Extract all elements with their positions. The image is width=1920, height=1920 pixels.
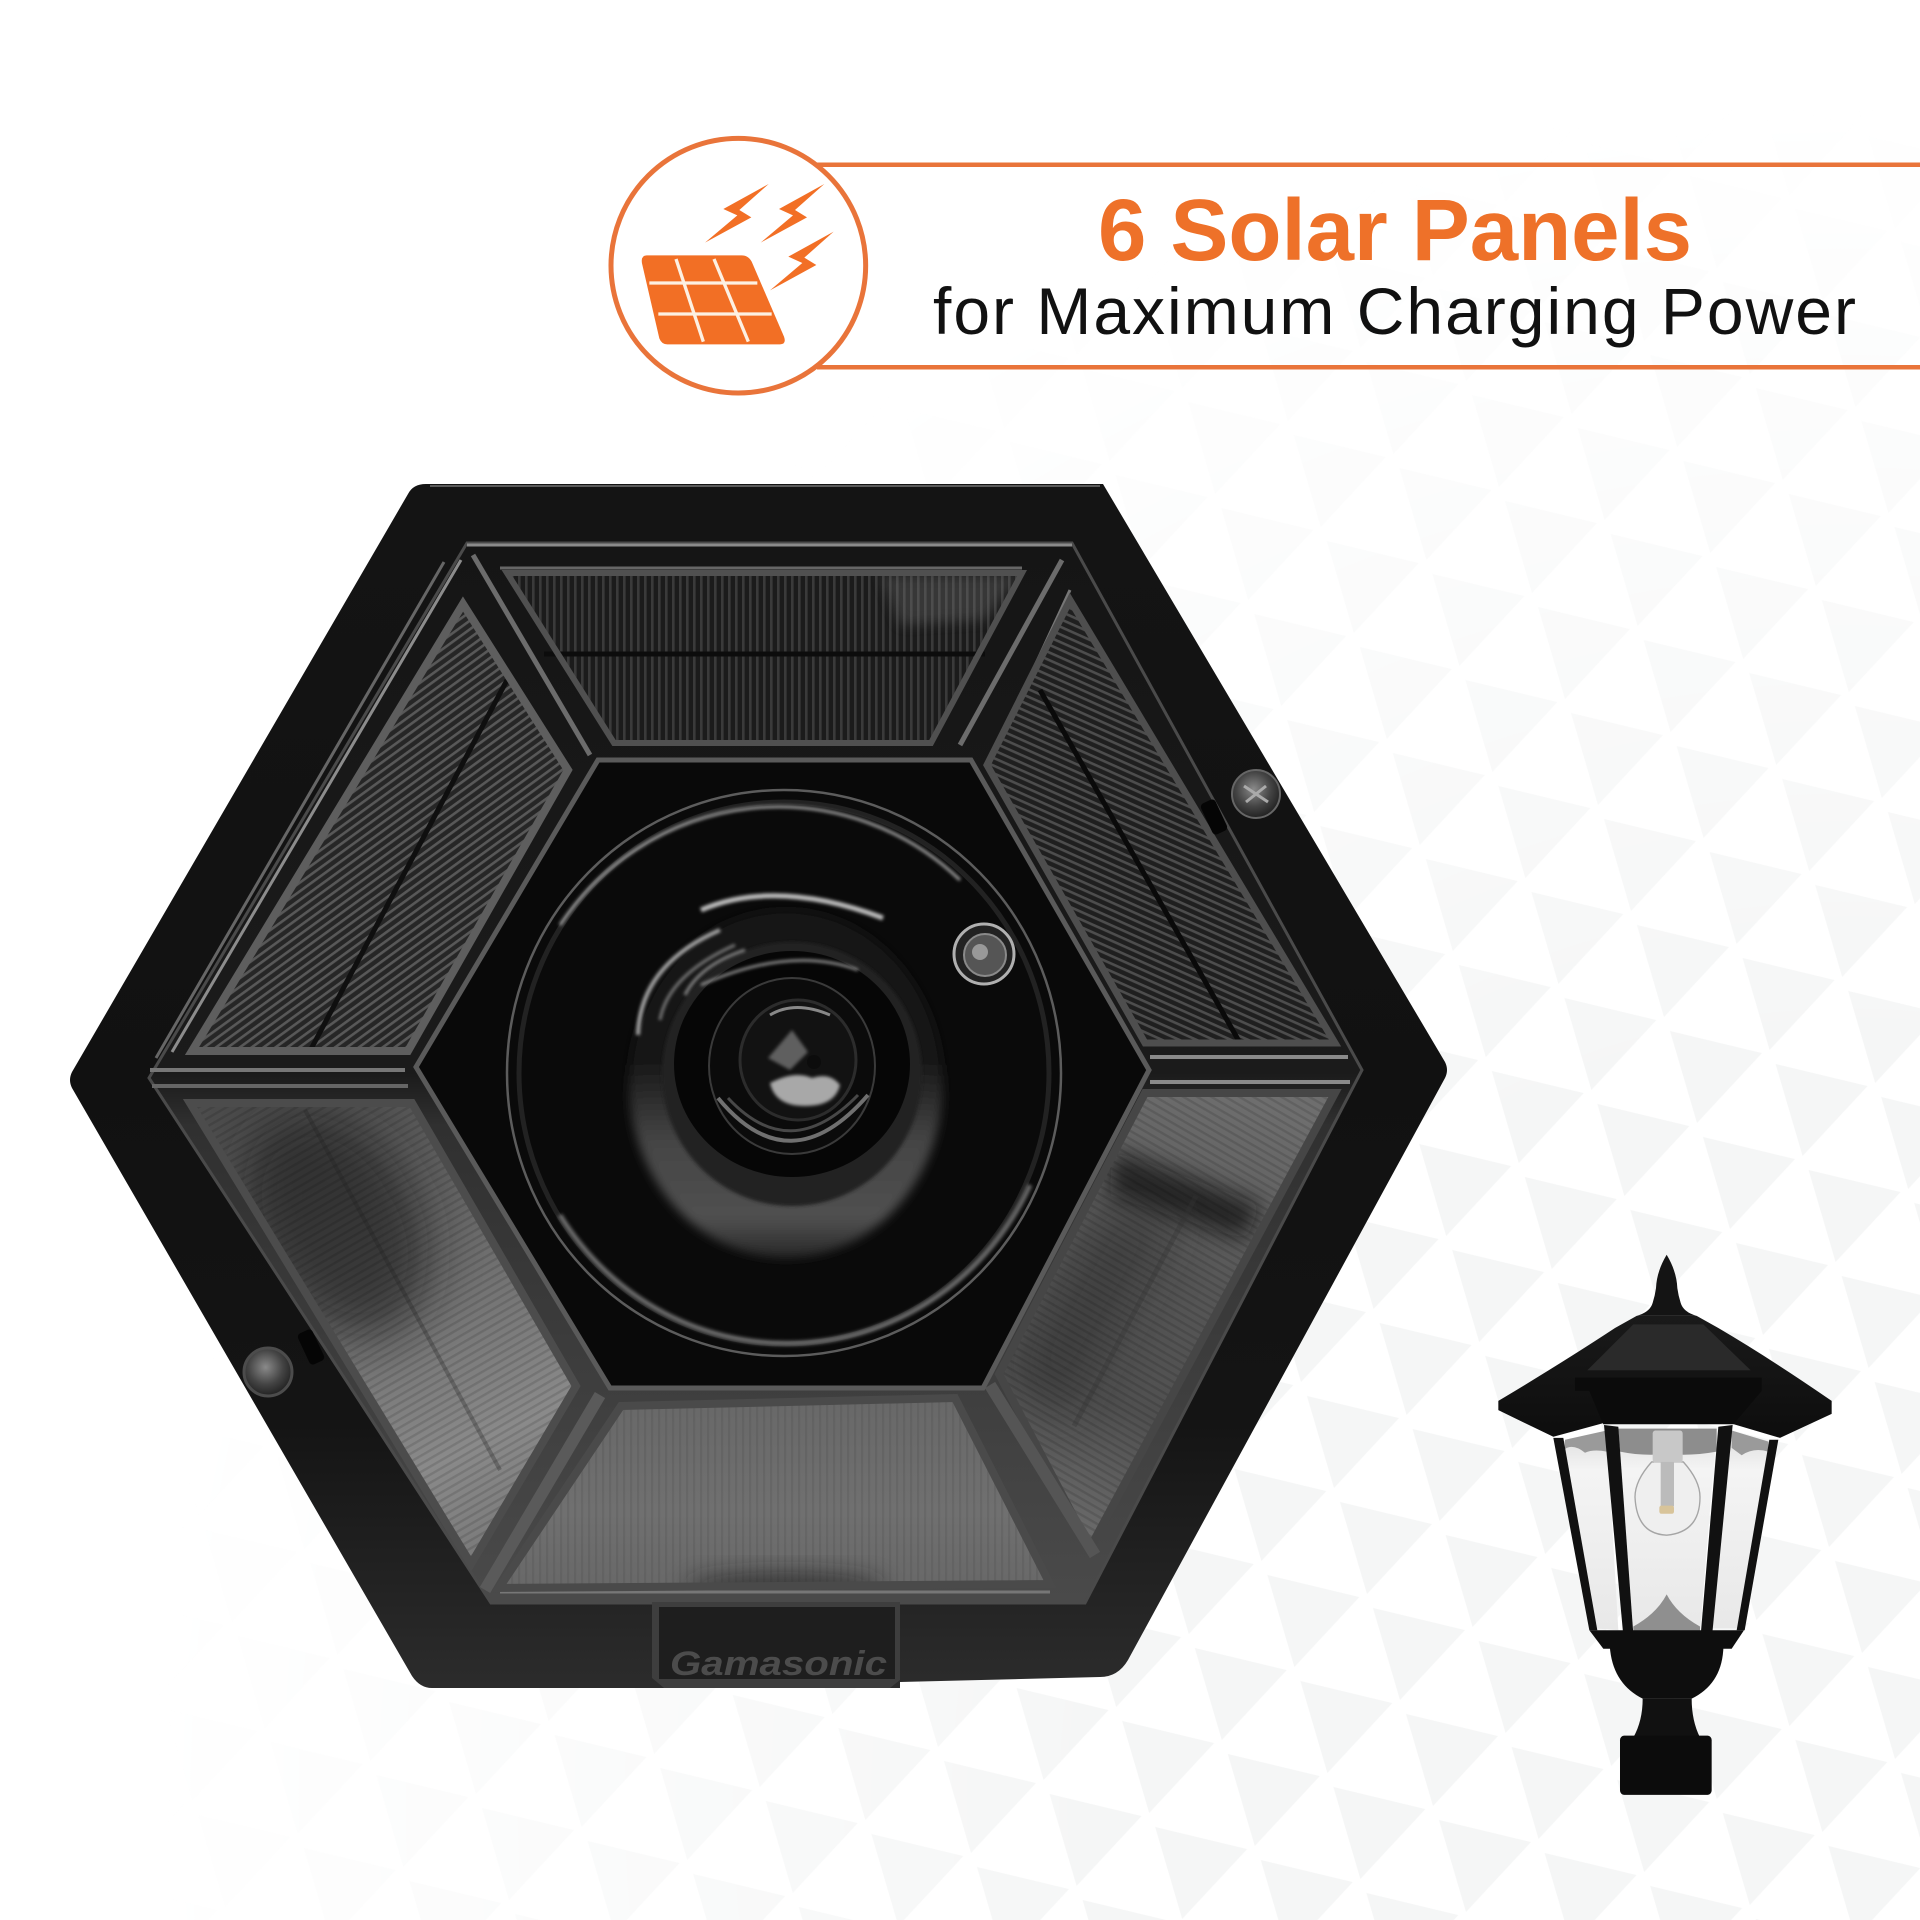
lantern solar cap xyxy=(1587,1324,1751,1370)
lantern eave band xyxy=(1575,1378,1762,1424)
dome lower crescent xyxy=(629,910,943,1258)
solar panel: upper right xyxy=(987,600,1335,1043)
product: post-mounted solar lantern xyxy=(1498,1255,1832,1795)
dome glints xyxy=(638,896,883,1035)
solar panel: lower right xyxy=(999,1093,1335,1548)
lantern glass panes xyxy=(1562,1429,1770,1632)
lantern finial xyxy=(1637,1255,1697,1316)
logo tab xyxy=(652,1602,900,1688)
lantern reflector xyxy=(1633,1594,1700,1632)
panel divider ridges xyxy=(473,555,1095,1590)
heading: 6 Solar Panels: 6 Solar Panels xyxy=(1098,182,1692,279)
solar panel: bottom xyxy=(499,1398,1050,1600)
solar panel: upper left xyxy=(192,604,568,1051)
central lens xyxy=(709,978,875,1154)
callout: top and bottom orange rules xyxy=(817,162,1920,370)
lantern post cuff xyxy=(1633,1699,1700,1738)
icon: solar panel with lightning bolts in a circle xyxy=(611,138,866,393)
lantern lower band and neck xyxy=(1589,1630,1744,1699)
screw: right xyxy=(1200,770,1280,836)
lantern post collar xyxy=(1620,1736,1712,1795)
lantern frame posts xyxy=(1553,1425,1778,1643)
central round dome xyxy=(507,790,1061,1356)
subheading: for Maximum Charging Power: for Maximum Charging Power xyxy=(933,274,1856,348)
solar panel: top xyxy=(507,573,1022,743)
solar panel: lower left xyxy=(190,1079,576,1564)
outer hexagon housing xyxy=(70,484,1447,1688)
background: faint triangle pattern xyxy=(923,877,1920,1920)
indicator LED xyxy=(954,924,1014,984)
logo tab: Gamasonic xyxy=(670,1645,887,1683)
central hexagon xyxy=(416,760,1149,1388)
product: hexagonal solar lamp top view xyxy=(70,484,1447,1688)
rim highlight xyxy=(430,485,1100,487)
raised inner frame xyxy=(149,543,1362,1603)
lantern roof xyxy=(1498,1316,1832,1438)
lantern bulb xyxy=(1635,1430,1700,1535)
frame highlights xyxy=(150,545,1350,1592)
screw: left xyxy=(244,1328,325,1396)
